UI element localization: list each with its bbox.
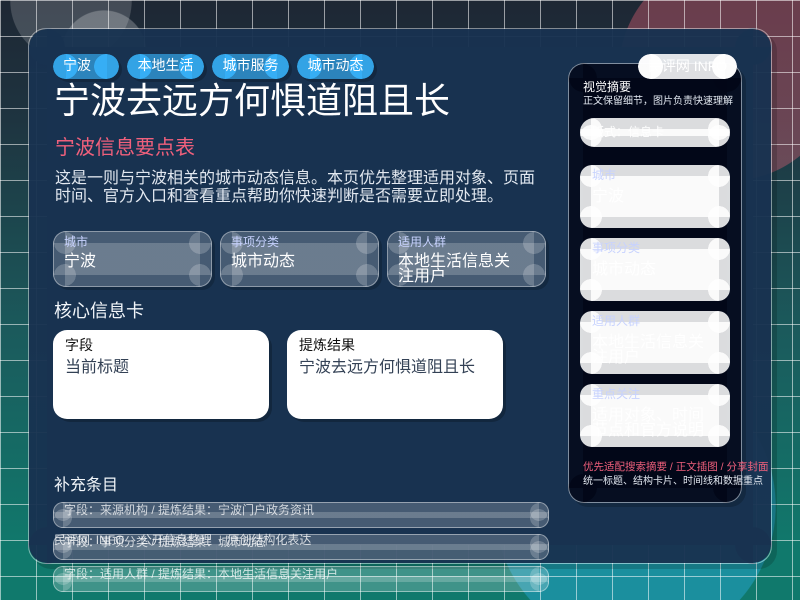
list row: 适用人群: 字段：适用人群 / 提炼结果：本地生活信息关注用户 — [64, 567, 338, 581]
tag: 城市动态: 城市动态 — [308, 57, 364, 73]
metric card: 城市: 宁波 — [64, 253, 96, 270]
rail badge: 民评网 INFO — [648, 58, 727, 74]
rail chip: 版式: 版式：信息卡 — [592, 125, 664, 139]
rail card: 适用人群: 适用人群 — [592, 314, 640, 328]
footer note: 民评网 INFO · 公开信息整理 · 原创结构化表达 — [54, 533, 311, 547]
white card: 提炼结果: 宁波去远方何惧道阻且长 — [299, 359, 475, 376]
subtitle: 宁波信息要点表 — [55, 137, 195, 159]
side rail panel — [568, 63, 742, 503]
tag: 本地生活: 本地生活 — [138, 57, 194, 73]
rail chip: 版式 — [580, 118, 730, 147]
rail card: 重点关注: 适用对象、时间节点和官方说明 — [592, 407, 704, 439]
white card: 提炼结果: 提炼结果 — [299, 337, 355, 353]
list row: 事项分类 — [53, 534, 549, 560]
section heading: 补充条目: 补充条目 — [54, 477, 118, 494]
tag: 城市动态 — [297, 54, 374, 79]
tag: 城市服务 — [212, 54, 289, 79]
rail card: 重点关注: 重点关注 — [592, 387, 640, 401]
metric card: 适用人群: 本地生活信息关注用户 — [398, 253, 510, 285]
rail title: 视觉摘要 — [583, 80, 631, 94]
metric card: 城市 — [53, 231, 212, 287]
white card: 提炼结果 — [287, 330, 503, 419]
title: 宁波去远方何惧道阻且长 — [54, 80, 450, 121]
rail card: 事项分类: 城市动态 — [592, 261, 656, 278]
white card: 字段 — [53, 330, 269, 419]
list row: 事项分类: 字段：事项分类 / 提炼结果：城市动态 — [64, 535, 266, 549]
metric card: 适用人群 — [387, 231, 546, 287]
rail card: 事项分类 — [580, 238, 730, 301]
rail card: 城市 — [580, 165, 730, 228]
description: 这是一则与宁波相关的城市动态信息。本页优先整理适用对象、页面时间、官方入口和查看重点帮助你快速判断是否需要立即处理。 — [55, 170, 535, 205]
rail card: 适用人群 — [580, 311, 730, 374]
rail card: 适用人群: 本地生活信息关注用户 — [592, 334, 704, 366]
metric card: 事项分类 — [220, 231, 379, 287]
metric card: 事项分类: 城市动态 — [231, 253, 295, 270]
metric card: 城市: 城市 — [64, 235, 88, 249]
list row: 来源机构: 字段：来源机构 / 提炼结果：宁波门户政务资讯 — [64, 503, 314, 517]
tag: 本地生活 — [127, 54, 204, 79]
list row: 适用人群 — [53, 566, 549, 592]
rail card: 事项分类: 事项分类 — [592, 241, 640, 255]
rail subtitle: 正文保留细节，图片负责快速理解 — [583, 96, 733, 107]
rail white note: 统一标题、结构卡片、时间线和数据重点 — [583, 476, 763, 487]
rail card: 重点关注 — [580, 384, 730, 447]
rail badge — [638, 54, 737, 79]
rail card: 城市: 城市 — [592, 168, 616, 182]
tags row — [53, 54, 377, 82]
rail pink note: 优先适配搜索摘要 / 正文插图 / 分享封面 — [583, 461, 769, 473]
white card: 字段: 字段 — [65, 337, 93, 353]
rail card: 城市: 宁波 — [592, 188, 624, 205]
metric card: 适用人群: 适用人群 — [398, 235, 446, 249]
metric card: 事项分类: 事项分类 — [231, 235, 279, 249]
white card: 字段: 当前标题 — [65, 359, 129, 376]
tag: 宁波: 宁波 — [63, 57, 91, 73]
list row: 来源机构 — [53, 502, 549, 528]
tag: 宁波 — [53, 54, 119, 79]
tag: 城市服务: 城市服务 — [222, 57, 278, 73]
section heading: 核心信息卡: 核心信息卡 — [54, 301, 144, 321]
